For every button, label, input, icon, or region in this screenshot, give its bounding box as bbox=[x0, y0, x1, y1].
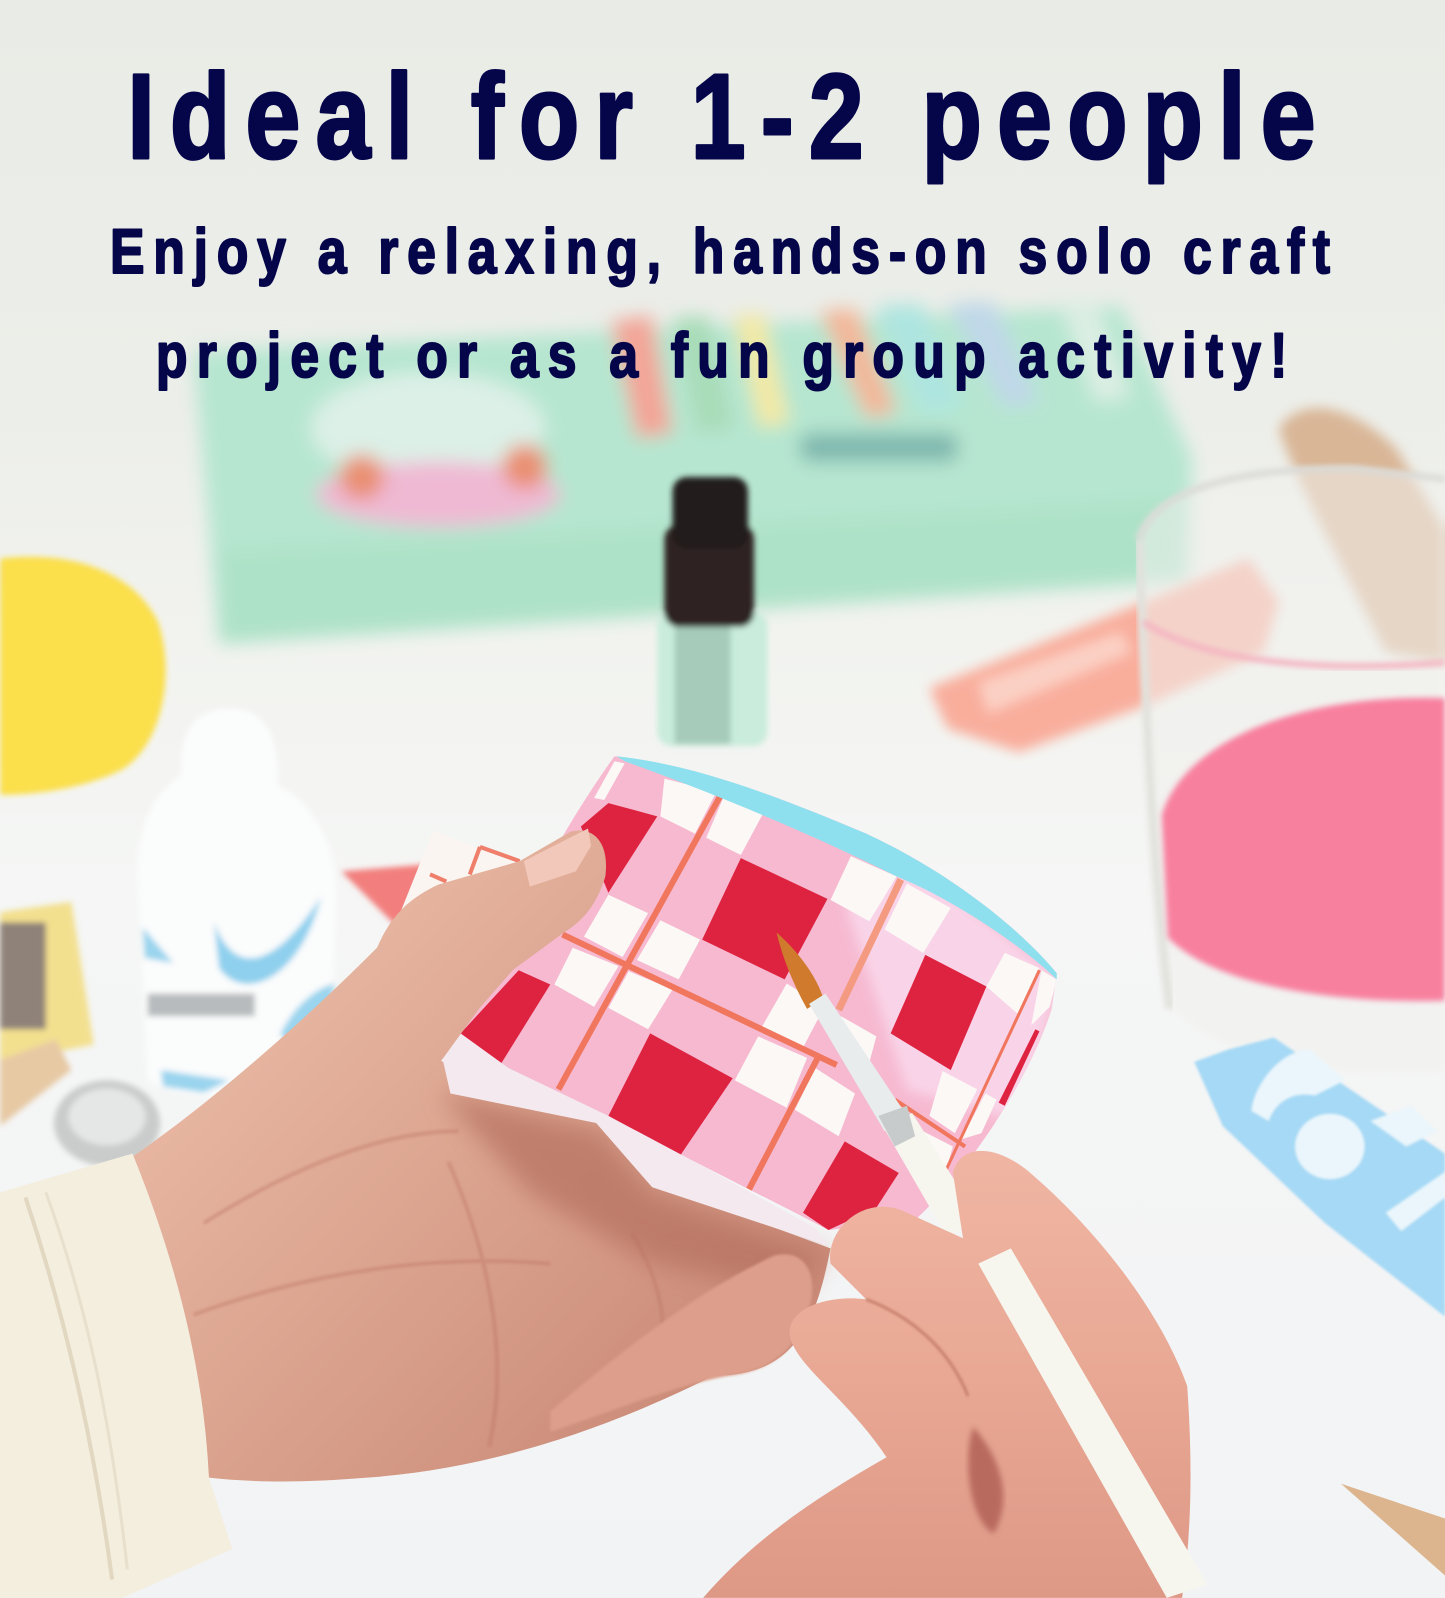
headline: Ideal for 1-2 people bbox=[127, 50, 1316, 184]
shadow under pot bbox=[438, 1090, 825, 1294]
blurred glass of pink paint bbox=[1139, 469, 1445, 1074]
small plaid folded corner behind thumb bbox=[392, 831, 525, 932]
blurred red clay fragment bbox=[341, 864, 428, 932]
blurred craft kit box bbox=[194, 300, 1192, 644]
palm creases bbox=[194, 1131, 663, 1447]
blurred yellow sponge bbox=[0, 557, 166, 795]
blurred wooden roller bbox=[1279, 408, 1445, 662]
subtitle line one: Enjoy a relaxing, hands-on solo craft bbox=[110, 217, 1330, 287]
subtitle line two: project or as a fun group activity! bbox=[156, 321, 1287, 391]
red plaid squares bbox=[461, 803, 1039, 1230]
hand painted plaid pot bbox=[448, 744, 1070, 1243]
curled finger bbox=[550, 1254, 812, 1432]
paper under pot bbox=[438, 1033, 827, 1245]
blurred blue paint tube bbox=[1194, 1037, 1445, 1317]
blue pot rim bbox=[617, 756, 1057, 979]
blurred peach clay block bbox=[929, 559, 1279, 752]
thumb nail bbox=[524, 829, 591, 887]
cream sleeve bbox=[0, 1154, 232, 1598]
blurred white glue bottle bbox=[138, 708, 336, 1097]
small wood stick lower right bbox=[1341, 1484, 1445, 1576]
blurred yellow packet and wood stick bbox=[0, 902, 160, 1166]
right hand holding brush bbox=[703, 1151, 1191, 1598]
paint brush handle bbox=[978, 1248, 1208, 1598]
pale right side of pot bbox=[846, 866, 1060, 1121]
orange plaid lines bbox=[558, 792, 1039, 1189]
shadow between fingers bbox=[968, 1427, 1003, 1534]
left hand palm bbox=[132, 948, 831, 1482]
paint brush tip and ferrule bbox=[777, 932, 978, 1238]
white plaid squares bbox=[554, 761, 1057, 1176]
blurred dark essential oil bottle bbox=[657, 477, 767, 746]
left thumb over pot bbox=[255, 829, 606, 1141]
